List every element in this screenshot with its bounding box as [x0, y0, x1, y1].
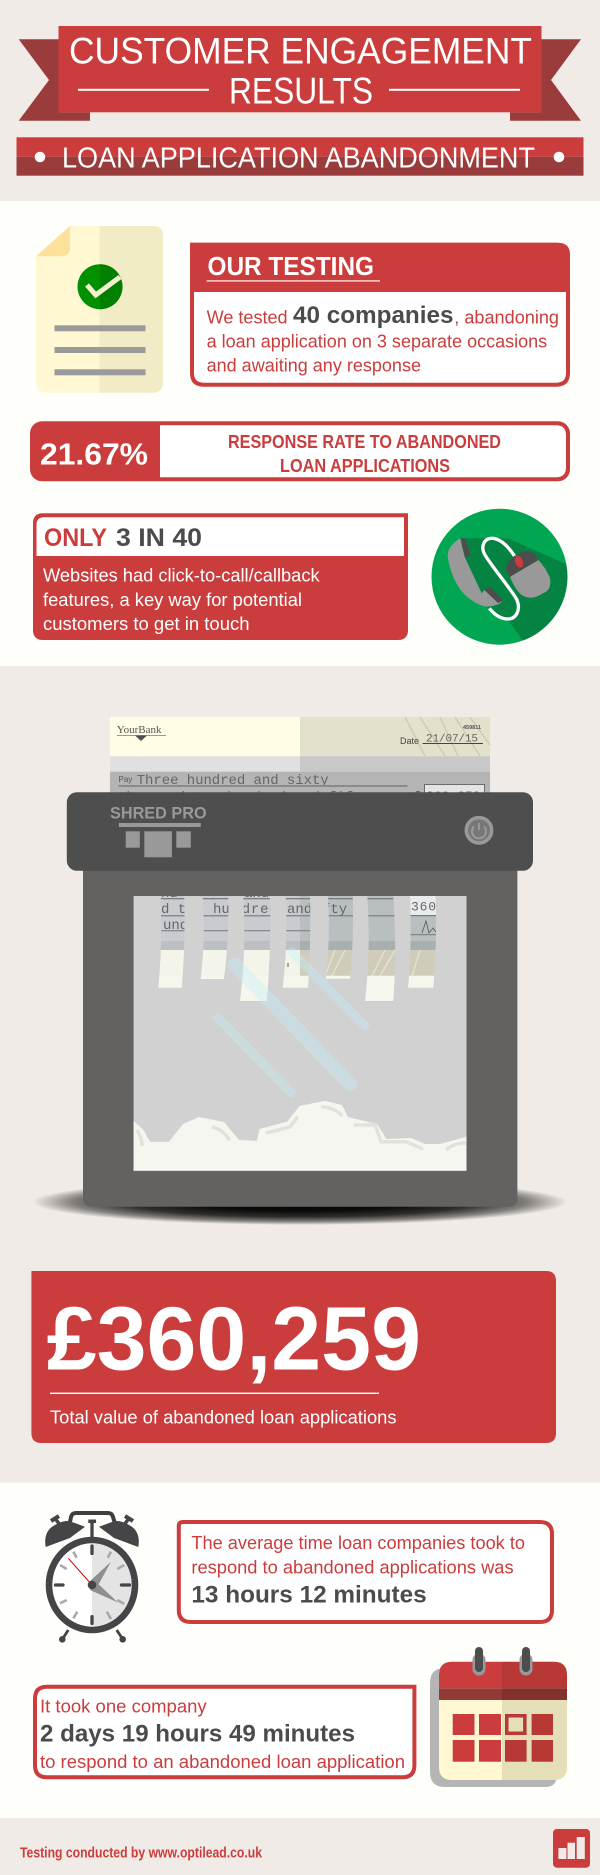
text: testing description: [207, 302, 559, 375]
icon: document with check: [36, 226, 163, 393]
text: testing description: a loan application on 3 separate occasions: [207, 331, 547, 351]
illustration: shredder with cheque: [32, 717, 568, 1225]
callout: longest response time: 2 days 19 hours 49 minutes: [40, 1721, 355, 1748]
icon: calendar: [430, 1651, 567, 1787]
text: testing description: and awaiting any response: [207, 355, 421, 375]
title banner: [58, 26, 542, 112]
shredded cheque strips: and: [244, 886, 269, 902]
callout: longest response time: to respond to an abandoned loan application: [40, 1752, 405, 1772]
stat: total value: £360,259: [47, 1289, 421, 1389]
panel: only 3 in 40: [33, 513, 408, 640]
callout: average response time: [179, 1522, 552, 1622]
title line 2: RESULTS: [229, 70, 373, 111]
label: response rate: [228, 431, 501, 476]
icon: power button: [466, 818, 492, 843]
cheque entering shredder: thousand two hundred and fifty: [118, 790, 370, 806]
cheque entering shredder: Pay: [118, 775, 132, 784]
shredded cheque strips: [158, 896, 436, 1001]
cheque entering shredder: 360,259: [426, 789, 481, 804]
heading: only 3 in 40: ONLY: [44, 524, 107, 552]
heading: only 3 in 40: [44, 524, 202, 552]
subtitle bar: LOAN APPLICATION ABANDONMENT: [62, 143, 535, 175]
callout: average response time: respond to abandoned applications was: [191, 1557, 514, 1577]
text: testing description: 40 companies: [293, 302, 454, 329]
shredded cheque strips: fty: [322, 902, 347, 918]
cheque entering shredder: Three hundred and sixty: [137, 773, 329, 789]
text: click-to-call description: features, a key way for potential: [43, 590, 302, 610]
callout: longest response time: It took one company: [40, 1696, 207, 1716]
text: click-to-call description: Websites had click-to-call/callback: [43, 566, 321, 586]
shredded cheque strips: dred: [242, 902, 278, 918]
icon: phone and mouse: [432, 508, 568, 645]
cheque entering shredder: [110, 717, 490, 806]
icon: alarm clock: [45, 1513, 139, 1643]
text: credit: Testing conducted by www.optilead.co.uk: [20, 1846, 263, 1862]
panel: response times: [0, 1483, 600, 1818]
heading: only 3 in 40: 3 IN 40: [116, 524, 202, 552]
shredder head: [67, 792, 533, 871]
cheque entering shredder: 459811: [463, 725, 481, 731]
text: click-to-call description: customers to get in touch: [43, 614, 250, 634]
shredded cheque strips: unds: [163, 918, 197, 934]
ribbon: right tail: [510, 39, 581, 121]
panel: testing and response section: [0, 201, 600, 666]
shredder body: [83, 860, 517, 1207]
brand: shred pro: [110, 804, 207, 857]
title line 1: CUSTOMER ENGAGEMENT: [69, 30, 532, 71]
shredder window: [134, 886, 466, 1171]
text: testing description: We tested: [207, 307, 288, 327]
cheque entering shredder: YourBank: [117, 724, 162, 736]
label: response rate: RESPONSE RATE TO ABANDONED: [228, 431, 501, 452]
cheque entering shredder: £: [414, 788, 422, 803]
shredded cheque strips: hu: [213, 902, 230, 918]
shredded cheque strips: 360: [411, 900, 436, 914]
cheque entering shredder: Date: [400, 736, 419, 746]
brand: shred pro: SHRED PRO: [110, 804, 207, 822]
callout: longest response time: [35, 1687, 414, 1777]
ribbon: left tail: [19, 39, 90, 121]
callout: average response time: The average time loan companies took to: [191, 1533, 525, 1553]
heading: our testing: OUR TESTING: [208, 253, 374, 281]
label: response rate: LOAN APPLICATIONS: [280, 455, 450, 476]
cheque entering shredder: 21/07/15: [426, 734, 478, 746]
text: click-to-call description: [43, 566, 321, 634]
icon: logo bars: [553, 1829, 590, 1868]
shredded cheque strips: nd: [161, 886, 178, 902]
label: total value: Total value of abandoned loan applications: [50, 1407, 396, 1427]
stat: response rate: 21.67%: [40, 436, 148, 471]
panel: total value: [31, 1271, 556, 1443]
text: testing description: , abandoning: [454, 307, 559, 327]
panel: our testing: [190, 243, 570, 385]
panel: header: [16, 26, 584, 176]
shadow under shredder: [32, 1179, 568, 1225]
glass reflections: [218, 952, 365, 1093]
panel: response rate: [30, 421, 570, 481]
shredded cheque strips: d t: [161, 902, 186, 918]
footer: [20, 1829, 590, 1868]
callout: average response time: 13 hours 12 minutes: [191, 1582, 427, 1609]
shredded paper pile: [134, 1101, 466, 1171]
shredded cheque strips: and: [287, 902, 312, 918]
